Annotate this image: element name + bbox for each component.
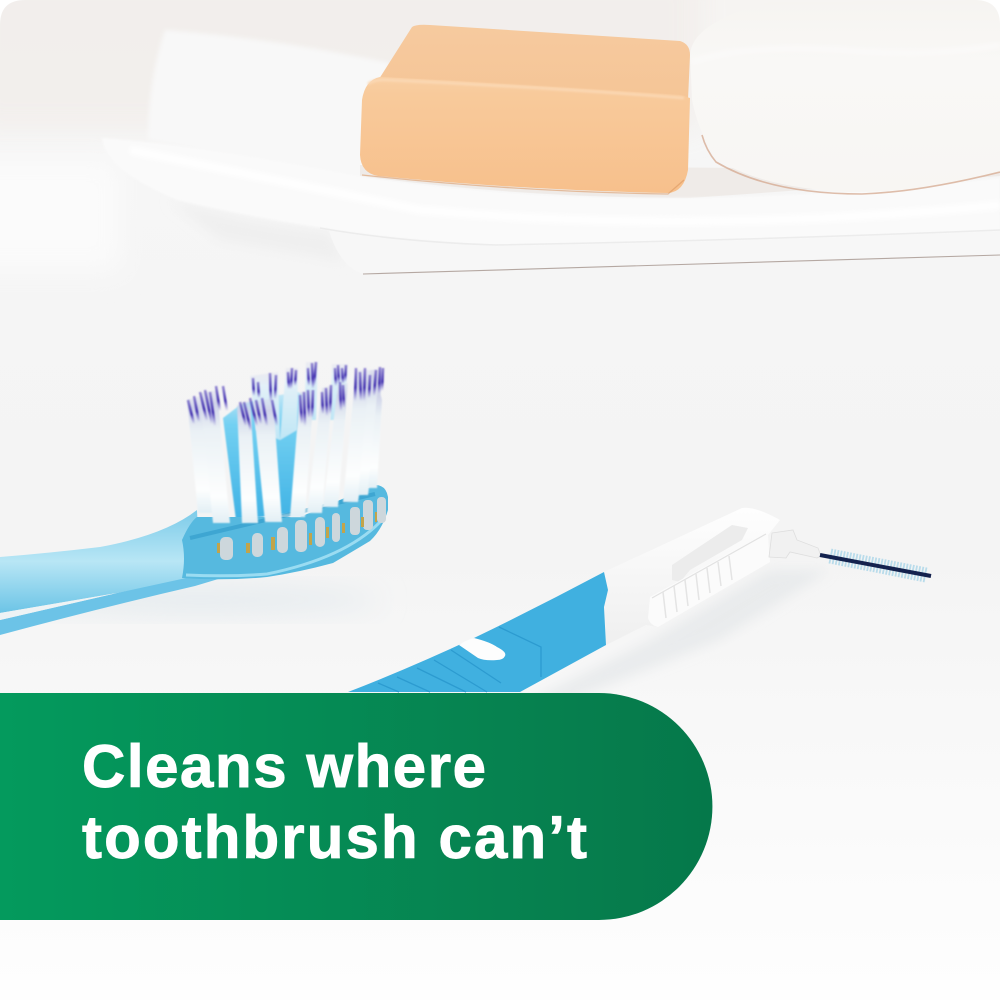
purple bristle tips bbox=[188, 362, 383, 431]
bristle head bbox=[820, 555, 931, 576]
bristle roots bbox=[220, 497, 386, 560]
dish rim bbox=[102, 138, 1000, 245]
grip window bbox=[672, 525, 748, 582]
under-rim shadow bbox=[170, 200, 345, 262]
soap dish bbox=[102, 30, 1000, 274]
corner masks bbox=[0, 0, 1000, 25]
banner heading: Cleans where bbox=[82, 733, 486, 800]
interdental brush bbox=[348, 508, 931, 705]
blue grip section bbox=[348, 572, 608, 692]
dish inner floor bbox=[360, 165, 1000, 198]
sliding clip bbox=[648, 532, 770, 627]
banner heading: toothbrush can’t bbox=[82, 804, 587, 871]
front bristle tufts bbox=[187, 368, 384, 523]
orange soap bar bbox=[360, 25, 690, 194]
toothbrush head bbox=[182, 485, 388, 579]
green banner bbox=[0, 693, 712, 920]
toothbrush bbox=[0, 362, 388, 635]
back bristles bbox=[223, 362, 348, 520]
dish back wall bbox=[148, 30, 390, 180]
soap front face bbox=[360, 77, 690, 193]
banner heading bbox=[82, 733, 587, 871]
dish foot bbox=[328, 215, 1000, 274]
toothbrush handle bbox=[0, 510, 225, 635]
soap top face bbox=[372, 25, 690, 100]
white grip section bbox=[604, 508, 780, 645]
gold staples bbox=[217, 512, 377, 553]
angled neck bbox=[769, 530, 821, 558]
round white soap bbox=[690, 0, 1000, 194]
